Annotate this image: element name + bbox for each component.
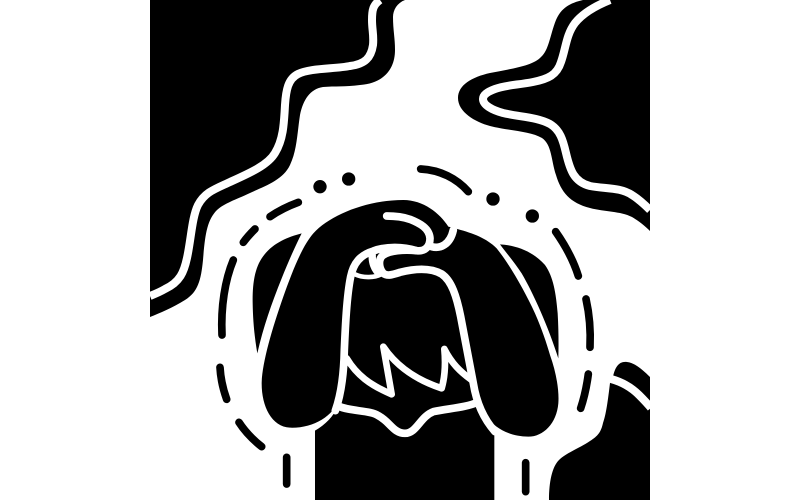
drool line <box>338 402 477 433</box>
left inner ear and hook line <box>335 216 430 411</box>
curl and right inner ear line <box>379 250 495 432</box>
right back ear <box>500 244 559 358</box>
curl thick edge <box>372 254 381 275</box>
outer hook line <box>432 230 453 247</box>
head and front ears <box>262 200 559 437</box>
dashed ring around head <box>220 169 590 492</box>
left back ear <box>253 233 302 353</box>
dog <box>220 169 590 500</box>
fringe zigzag <box>347 347 472 394</box>
background shape: top-right blob <box>458 0 650 231</box>
face outline strokes <box>335 216 495 433</box>
background shape: top-left blob <box>150 0 405 317</box>
dots around head <box>313 172 539 223</box>
torso <box>315 395 494 500</box>
small curve under triangle <box>355 274 382 277</box>
background shape: bottom-right blob <box>549 362 651 500</box>
